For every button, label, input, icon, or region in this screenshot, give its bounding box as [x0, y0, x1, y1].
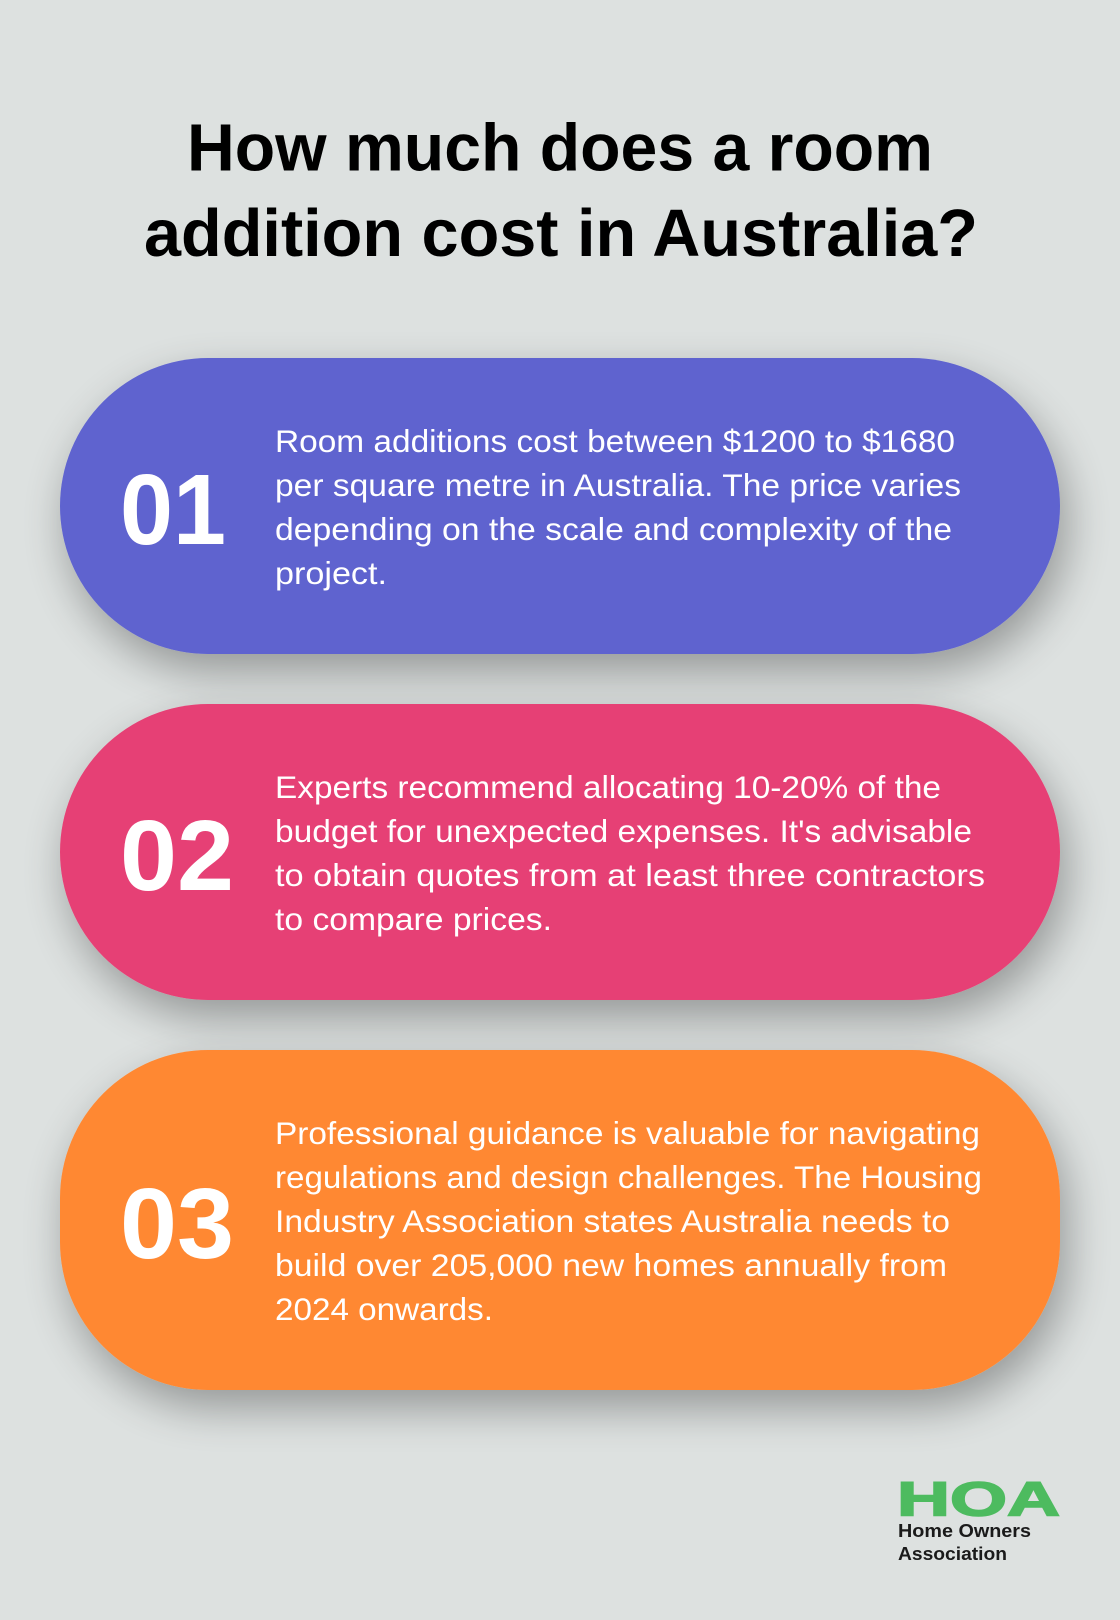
text block 02: Experts recommend allocating 10-20% of the — [275, 769, 941, 805]
text block 02: to obtain quotes from at least three contractors — [275, 857, 985, 893]
pill background 02 — [60, 704, 1060, 1000]
title: How much does a room — [187, 110, 933, 186]
text block 02: budget for unexpected expenses. It's advisable — [275, 813, 972, 849]
logo: HOA Home Owners Association: HOA — [897, 1474, 1060, 1526]
number 02: 02 — [120, 800, 234, 912]
text block 01: Room additions cost between $1200 to $1680 — [275, 423, 955, 459]
text block 03: regulations and design challenges. The Housing — [275, 1159, 982, 1195]
text block 01: project. — [275, 555, 387, 591]
text block 01: depending on the scale and complexity of the — [275, 511, 952, 547]
text block 03: 2024 onwards. — [275, 1291, 493, 1327]
text block 03: Industry Association states Australia needs to — [275, 1203, 950, 1239]
panel: step 03 — [60, 1050, 1060, 1390]
number 03: 03 — [120, 1168, 234, 1280]
panel: step 02 — [60, 704, 1060, 1000]
logo: HOA Home Owners Association: Home Owners — [898, 1520, 1031, 1541]
text block 03: build over 205,000 new homes annually from — [275, 1247, 947, 1283]
logo: HOA Home Owners Association: Association — [898, 1543, 1007, 1564]
text block 03: Professional guidance is valuable for navigating — [275, 1115, 980, 1151]
title: addition cost in Australia? — [144, 196, 978, 271]
panel: step 01 — [60, 358, 1060, 654]
text block 01 — [275, 423, 961, 591]
number 01: 01 — [120, 454, 226, 566]
text block 03 — [275, 1115, 982, 1327]
text block 02: to compare prices. — [275, 901, 552, 937]
pill background 03 — [60, 1050, 1060, 1390]
text block 01: per square metre in Australia. The price varies — [275, 467, 961, 503]
text block 02 — [275, 769, 985, 937]
title — [144, 110, 978, 271]
logo: HOA Home Owners Association — [897, 1474, 1060, 1564]
pill background 01 — [60, 358, 1060, 654]
